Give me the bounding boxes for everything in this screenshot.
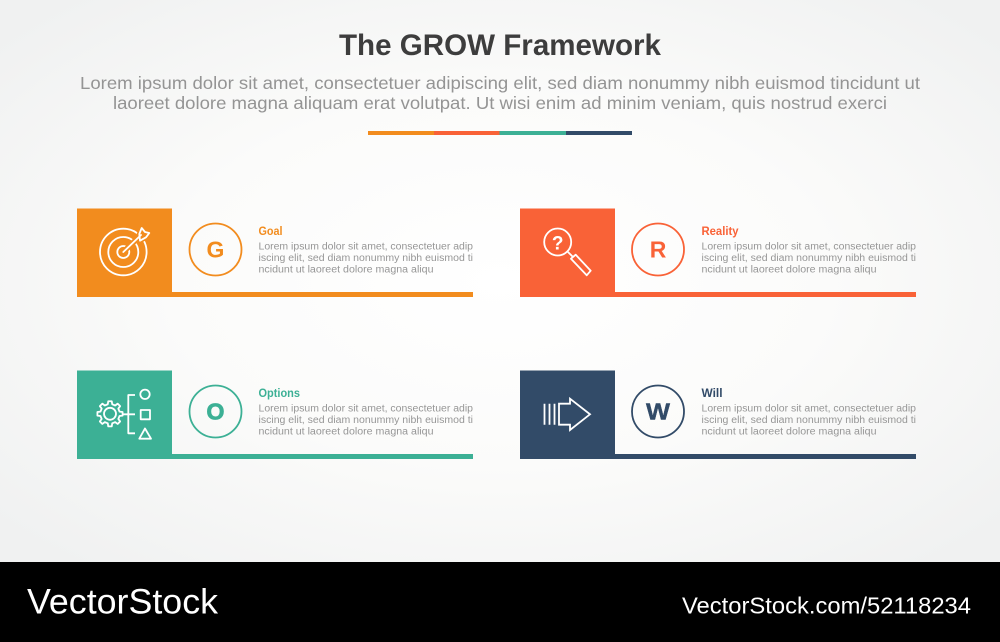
panel: Will	[520, 370, 916, 459]
letter badge W: W	[646, 398, 670, 424]
Reality body text: iscing elit, sed diam nonummy nibh euismod ti	[702, 253, 916, 264]
subtitle text block	[80, 73, 920, 113]
letter badge O	[190, 386, 242, 438]
Will colour block and underline	[520, 370, 916, 459]
Goal body text: Lorem ipsum dolor sit amet, consectetuer adip	[258, 242, 473, 252]
Goal heading: Goal	[258, 226, 282, 238]
footer image id: VectorStock.com/52118234	[682, 592, 971, 618]
letter badge W	[632, 386, 684, 438]
Options heading: Options	[258, 388, 300, 400]
subtitle text block: laoreet dolore magna aliquam erat volutpat. Ut wisi enim ad minim veniam, quis nostrud exerci	[113, 93, 887, 113]
panel: Goal	[77, 208, 473, 297]
icon: forward arrow with bars	[544, 399, 590, 430]
icon: gear with shape options	[97, 390, 151, 439]
letter badge G	[190, 224, 242, 276]
Options body text: ncidunt ut laoreet dolore magna aliqu	[258, 426, 434, 438]
Will body text: iscing elit, sed diam nonummy nibh euismod ti	[702, 415, 916, 426]
Goal body text: iscing elit, sed diam nonummy nibh euismod ti	[258, 253, 473, 264]
Reality body text: ncidunt ut laoreet dolore magna aliqu	[702, 264, 876, 276]
Will body text: ncidunt ut laoreet dolore magna aliqu	[702, 426, 876, 438]
Options colour block and underline	[77, 370, 473, 459]
Reality body text	[702, 242, 916, 276]
Goal colour block and underline	[77, 208, 473, 297]
footer logo text: VectorStock	[27, 582, 219, 622]
panel: Options	[77, 370, 473, 459]
panel: Reality	[520, 208, 916, 297]
icon: magnifier with question mark	[544, 228, 591, 275]
Goal body text: ncidunt ut laoreet dolore magna aliqu	[258, 264, 434, 276]
letter badge R: R	[650, 236, 667, 262]
Will heading: Will	[702, 388, 722, 400]
Options body text	[258, 404, 473, 438]
Options body text: iscing elit, sed diam nonummy nibh euismod ti	[258, 415, 473, 426]
footer watermark bar	[0, 562, 1000, 642]
subtitle text block: Lorem ipsum dolor sit amet, consectetuer adipiscing elit, sed diam nonummy nibh euismod tincidunt ut	[80, 73, 920, 93]
Reality heading: Reality	[702, 226, 739, 238]
colour divider bar	[368, 131, 632, 135]
Will body text	[702, 404, 916, 438]
letter badge O: O	[207, 398, 224, 424]
letter badge G: G	[207, 236, 224, 262]
Reality colour block and underline	[520, 208, 916, 297]
letter badge R	[632, 224, 684, 276]
icon: target with arrow	[100, 228, 149, 275]
Reality body text: Lorem ipsum dolor sit amet, consectetuer adip	[702, 242, 916, 252]
Options body text: Lorem ipsum dolor sit amet, consectetuer adip	[258, 404, 473, 414]
Goal body text	[258, 242, 473, 276]
Will body text: Lorem ipsum dolor sit amet, consectetuer adip	[702, 404, 916, 414]
icon: magnifier with question mark: ?	[552, 234, 564, 254]
title: The GROW Framework	[339, 29, 661, 62]
